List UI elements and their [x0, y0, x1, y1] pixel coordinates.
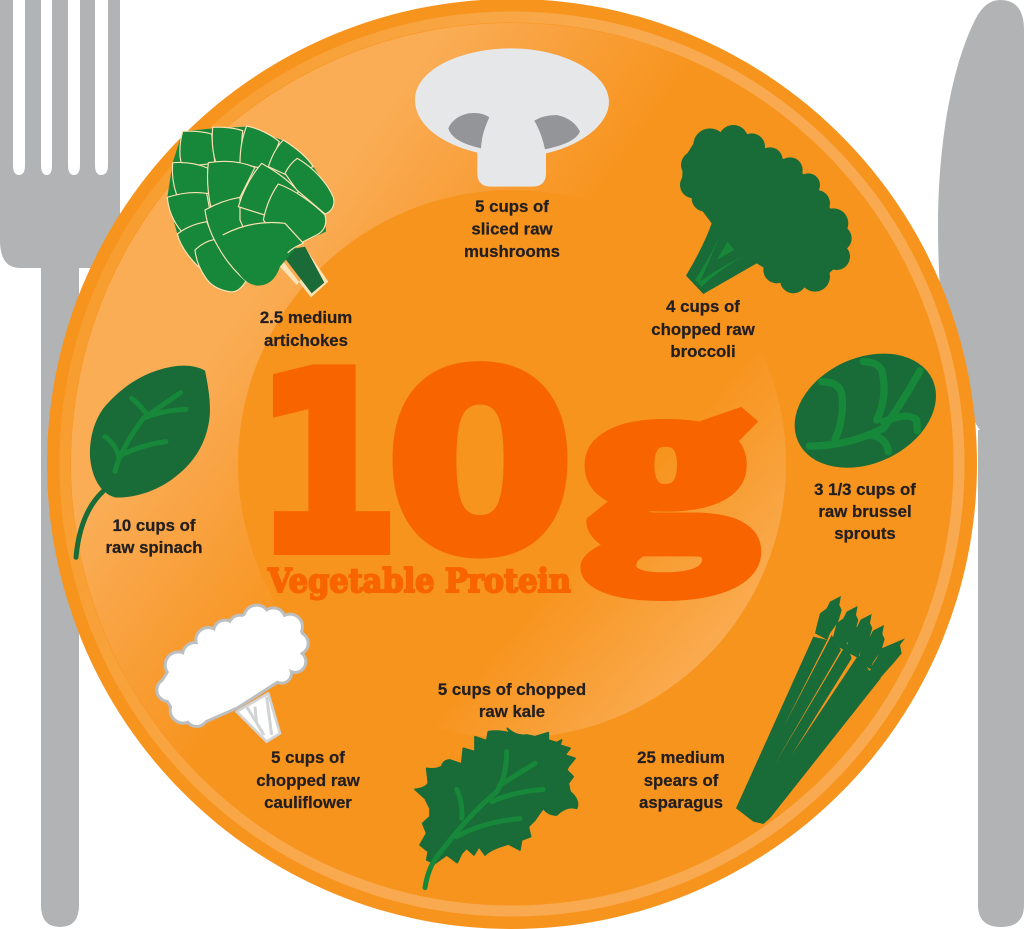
- title: 10g: 1: [255, 322, 399, 607]
- label: artichokes: 2.5 medium: [260, 308, 352, 327]
- label: cauliflower: chopped raw: [256, 771, 361, 790]
- label: asparagus: spears of: [644, 771, 719, 790]
- label: mushrooms: 5 cups of: [475, 197, 549, 216]
- icon: knife: [938, 0, 1024, 927]
- subtitle: Vegetable Protein: Vegetable Protein: [267, 561, 571, 600]
- title: 10g: g: [583, 326, 753, 596]
- icon: cauliflower: [158, 607, 307, 742]
- label: broccoli: 4 cups of: [666, 297, 740, 316]
- label: asparagus: 25 medium: [637, 748, 725, 767]
- label: brussel sprouts: 3 1/3 cups of: [814, 480, 916, 499]
- label: broccoli: broccoli: [670, 342, 736, 361]
- icon: asparagus: [736, 596, 905, 824]
- icon: brussel sprout: [776, 332, 955, 490]
- icon: broccoli: [680, 125, 852, 294]
- label: cauliflower: 5 cups of: [271, 748, 345, 767]
- title: 10g: 0: [386, 322, 574, 607]
- label: brussel sprouts: raw brussel: [818, 502, 912, 521]
- label: kale: 5 cups of chopped: [438, 680, 586, 699]
- label: mushrooms: mushrooms: [464, 242, 560, 261]
- label: mushrooms: sliced raw: [471, 220, 554, 238]
- label: spinach: 10 cups of: [112, 516, 196, 535]
- label: artichokes: artichokes: [264, 331, 348, 350]
- label: spinach: raw spinach: [106, 538, 202, 557]
- label: broccoli: chopped raw: [651, 320, 756, 339]
- icon: fork: [0, 0, 120, 927]
- icon: mushroom: [415, 48, 609, 187]
- icon: kale leaf: [415, 728, 577, 888]
- label: cauliflower: cauliflower: [264, 793, 352, 812]
- label: brussel sprouts: sprouts: [834, 524, 896, 543]
- icon: spinach leaf: [76, 366, 210, 557]
- label: asparagus: asparagus: [639, 793, 723, 812]
- icon: artichoke: [167, 126, 334, 297]
- label: kale: raw kale: [479, 702, 545, 721]
- title: 10g: [255, 322, 753, 607]
